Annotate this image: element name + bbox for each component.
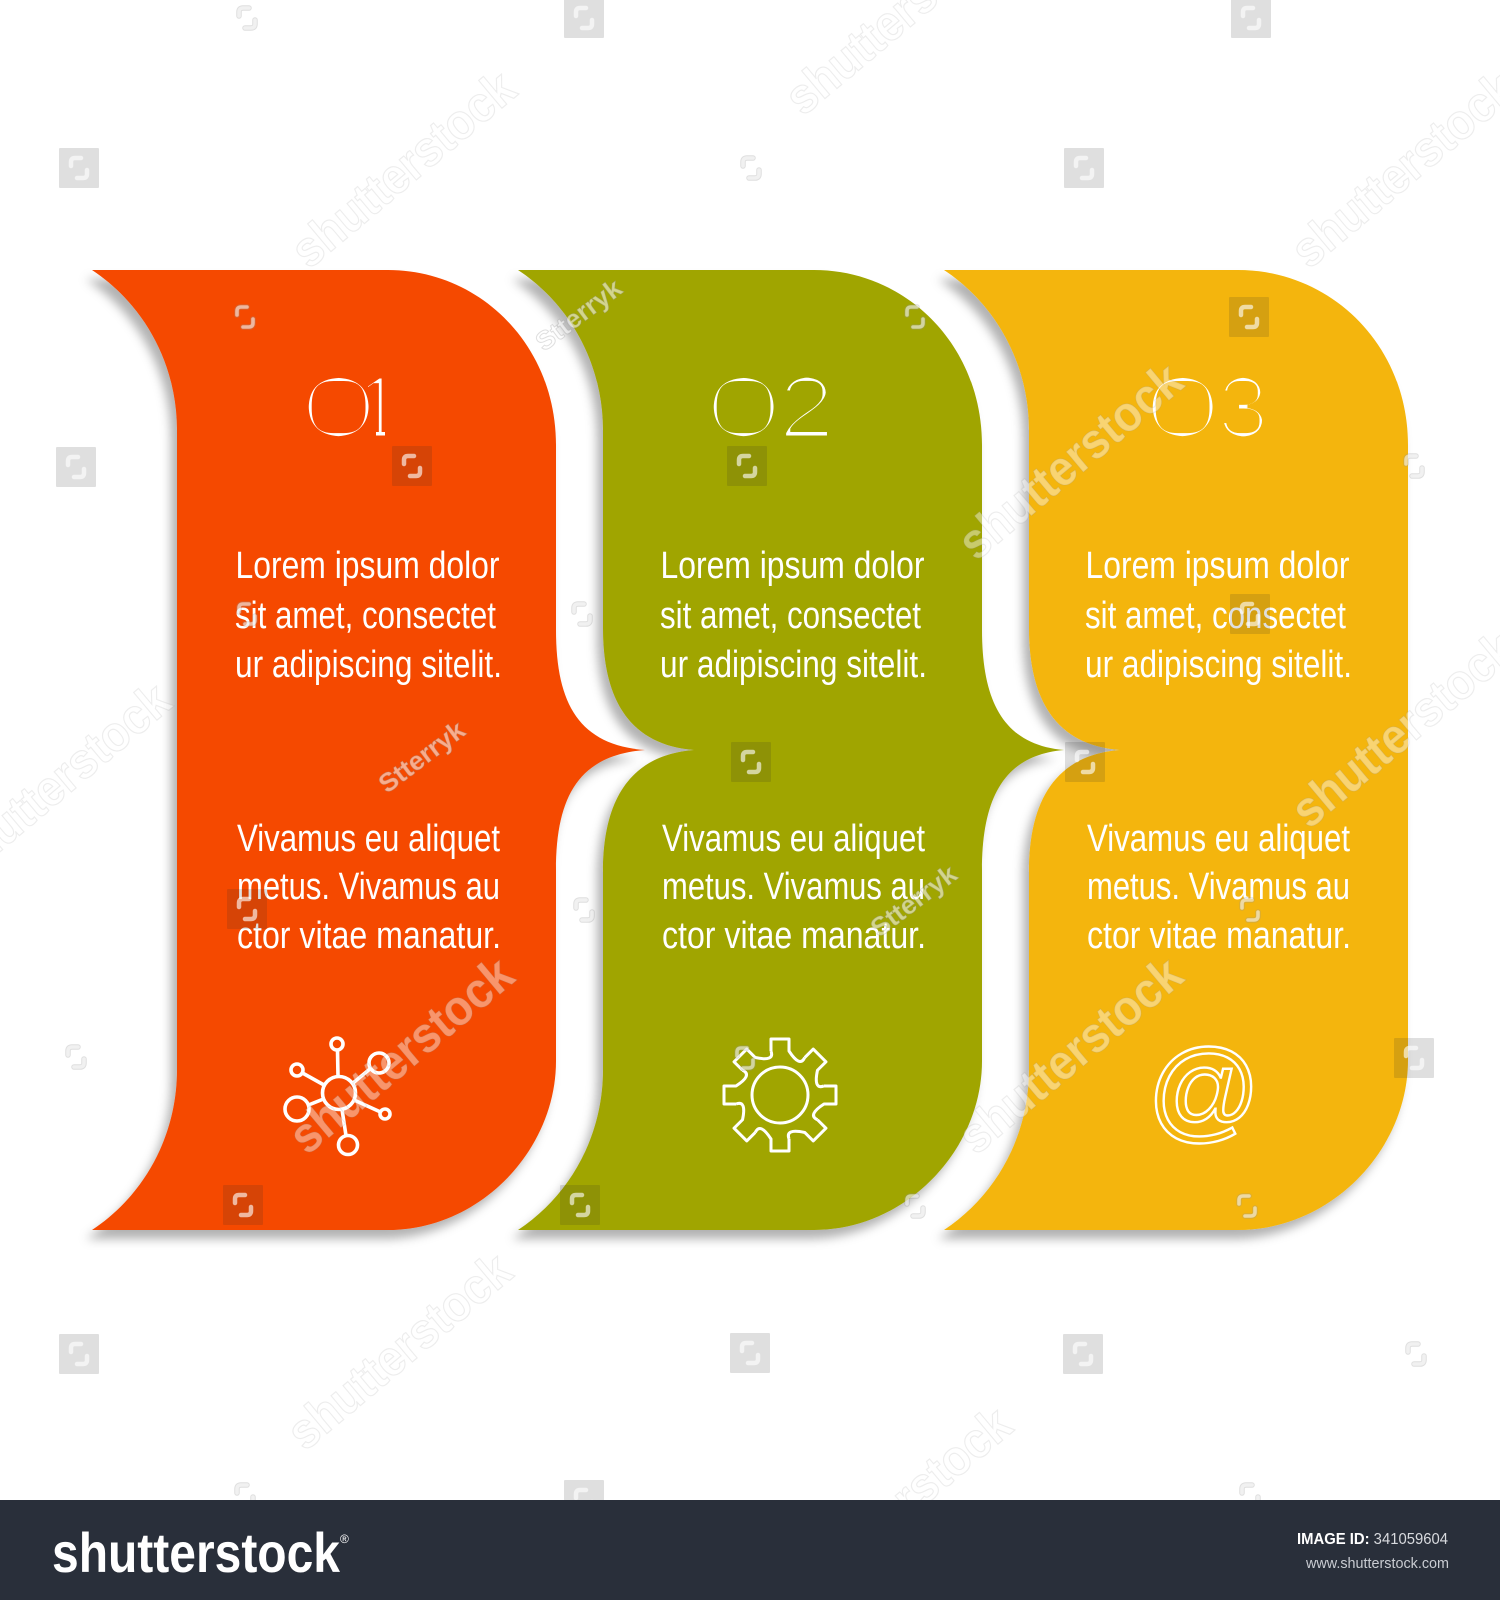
text block: vivamus: ctor vitae manatur. [1087,915,1351,957]
text block: vivamus: Vivamus eu aliquet [662,818,925,860]
text block: lorem: sit amet, consectet [660,595,921,637]
text block: vivamus [237,818,501,957]
text block: lorem: Lorem ipsum dolor [660,545,925,587]
number 01: 1 [354,359,403,456]
text block: lorem [660,545,927,686]
image id: IMAGE ID: 341059604 [1297,1531,1448,1548]
footer logo wordmark: shutterstock [52,1521,341,1584]
watermark: diagonal wordmarks: shutterstock [280,59,526,278]
watermark: diagonal wordmarks: shutterstock [947,351,1193,570]
text block: lorem: Lorem ipsum dolor [1086,545,1350,587]
panel: step 1 red [92,270,645,1230]
text block: lorem [1085,545,1352,686]
panel: step 2 olive [518,270,1064,1230]
footer bar [0,1500,1500,1600]
watermark: diagonal wordmarks: shutterstock [947,945,1193,1164]
text block: vivamus [662,818,926,957]
icon: at sign: @ [1147,1027,1261,1152]
icon: network nodes [285,1038,390,1154]
watermark: diagonal wordmarks: shutterstock [276,1241,522,1460]
text block: lorem: sit amet, consectet [1085,595,1346,637]
number 03: 0 [1142,359,1223,456]
text block: vivamus: Vivamus eu aliquet [237,818,500,860]
watermark: diagonal wordmarks: Stterryk [373,714,471,799]
number 02: 0 [703,359,784,456]
text block: lorem [235,545,502,686]
text block: lorem: sit amet, consectet [235,595,496,637]
number 02: 2 [778,359,835,456]
number 03 [1142,359,1269,456]
number 01 [308,378,385,436]
registered mark: ® [340,1532,349,1546]
number 02 [703,359,835,456]
number 03: 3 [1217,359,1269,456]
number 01: 0 [298,359,379,456]
text block: vivamus [1087,818,1351,957]
text block: lorem: ur adipiscing sitelit. [1085,644,1352,686]
watermark: diagonal wordmarks: Stterryk [865,858,963,943]
text block: vivamus: metus. Vivamus au [662,866,925,908]
text block: vivamus: metus. Vivamus au [237,866,500,908]
watermark: diagonal wordmarks: Stterryk [530,272,628,357]
panel shape: red [92,270,645,1230]
panel: step 3 yellow [944,270,1408,1230]
watermark: diagonal wordmarks: shutterstock [278,945,524,1164]
text block: lorem: ur adipiscing sitelit. [660,644,927,686]
icon: gear [723,1038,837,1152]
panel shape: yellow [944,270,1408,1230]
website url: www.shutterstock.com [1305,1555,1449,1572]
text block: vivamus: metus. Vivamus au [1087,866,1350,908]
text block: vivamus: ctor vitae manatur. [662,915,926,957]
text block: lorem: ur adipiscing sitelit. [235,644,502,686]
text block: vivamus: Vivamus eu aliquet [1087,818,1350,860]
panel shape: olive [518,270,1064,1230]
text block: vivamus: ctor vitae manatur. [237,915,501,957]
text block: lorem: Lorem ipsum dolor [236,545,500,587]
